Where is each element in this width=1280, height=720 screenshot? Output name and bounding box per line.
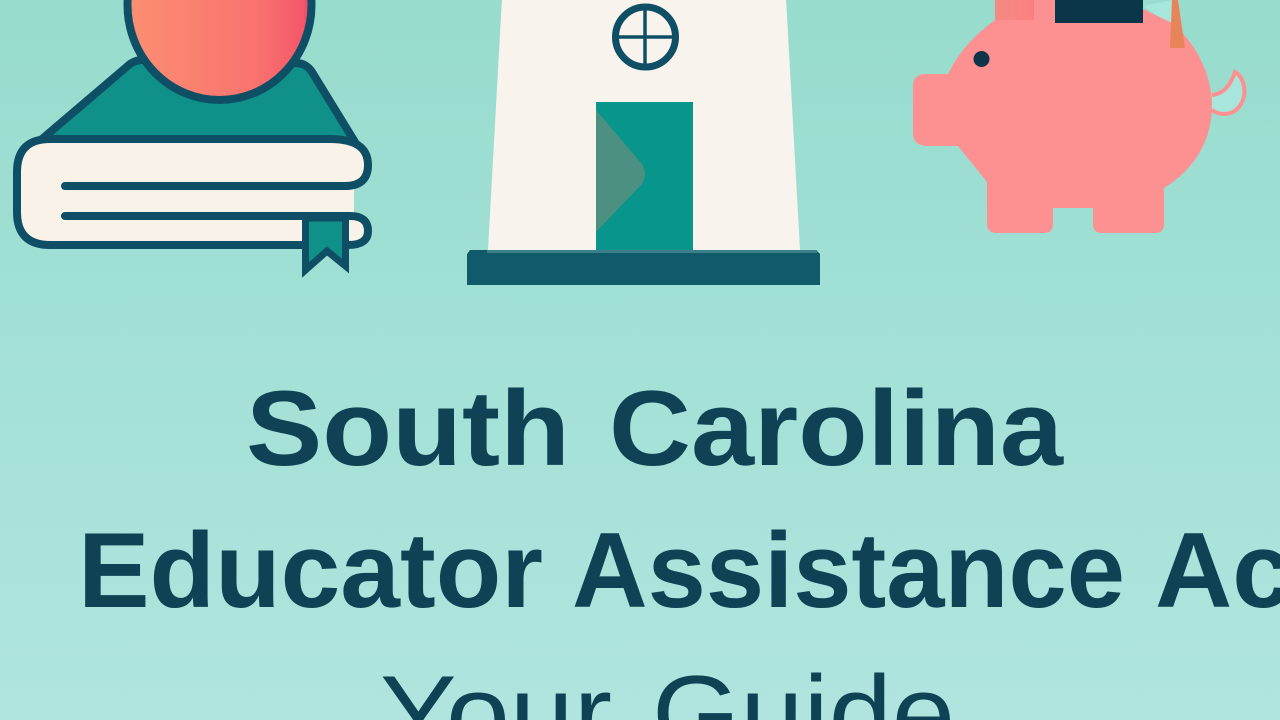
book cover xyxy=(42,60,366,160)
door shape xyxy=(596,110,645,232)
pale patch behind back xyxy=(1143,0,1178,30)
apple xyxy=(128,0,312,100)
word: South: South xyxy=(246,368,570,488)
icon: piggy bank xyxy=(913,0,1244,233)
title xyxy=(78,368,1280,720)
icon: school building xyxy=(467,0,820,285)
base highlight xyxy=(487,250,817,253)
icon: book with apple xyxy=(17,0,368,270)
word: Educator: Educator xyxy=(78,510,543,630)
pig body xyxy=(913,0,1212,233)
word: Assistance: Assistance xyxy=(572,510,1125,630)
word: Carolina: Carolina xyxy=(609,368,1065,488)
book outline xyxy=(17,139,368,245)
round window xyxy=(616,7,676,67)
coin slot xyxy=(1055,0,1143,23)
pig tail xyxy=(1212,72,1244,114)
door xyxy=(596,102,693,250)
pig ear xyxy=(995,0,1034,24)
bookmark xyxy=(306,218,346,270)
orange tag xyxy=(1170,0,1185,48)
book pages xyxy=(17,139,368,245)
pig eye xyxy=(974,51,990,67)
building wall xyxy=(488,0,800,250)
base xyxy=(467,250,820,285)
